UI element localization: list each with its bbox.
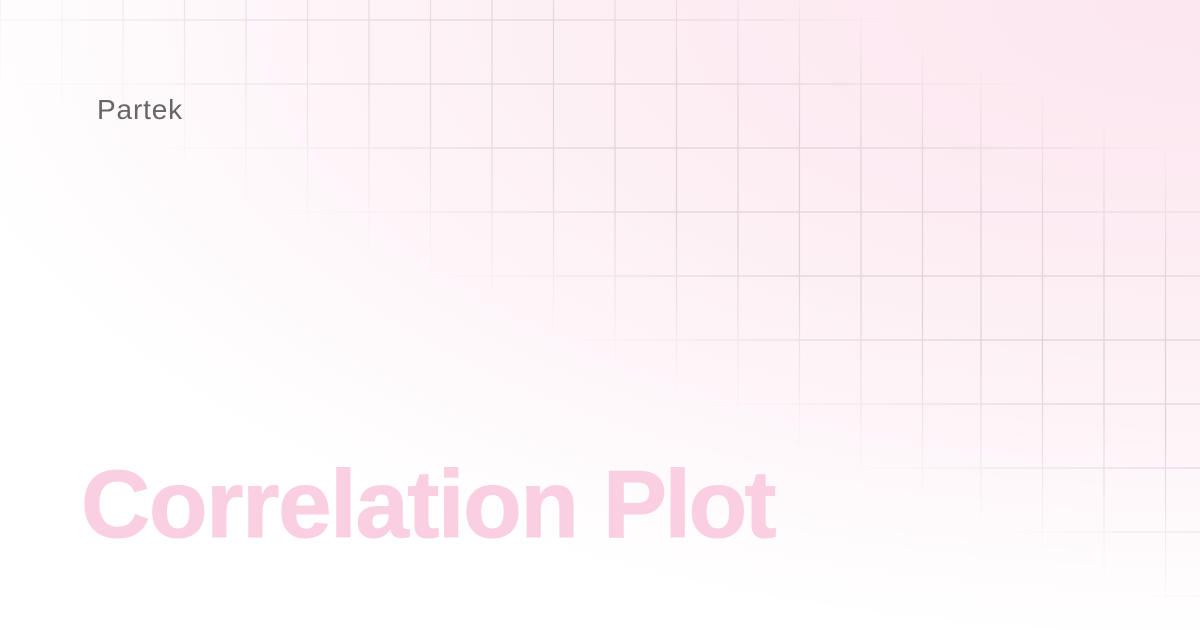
brand name: Partek <box>97 94 183 125</box>
title: Correlation Plot <box>81 451 774 558</box>
